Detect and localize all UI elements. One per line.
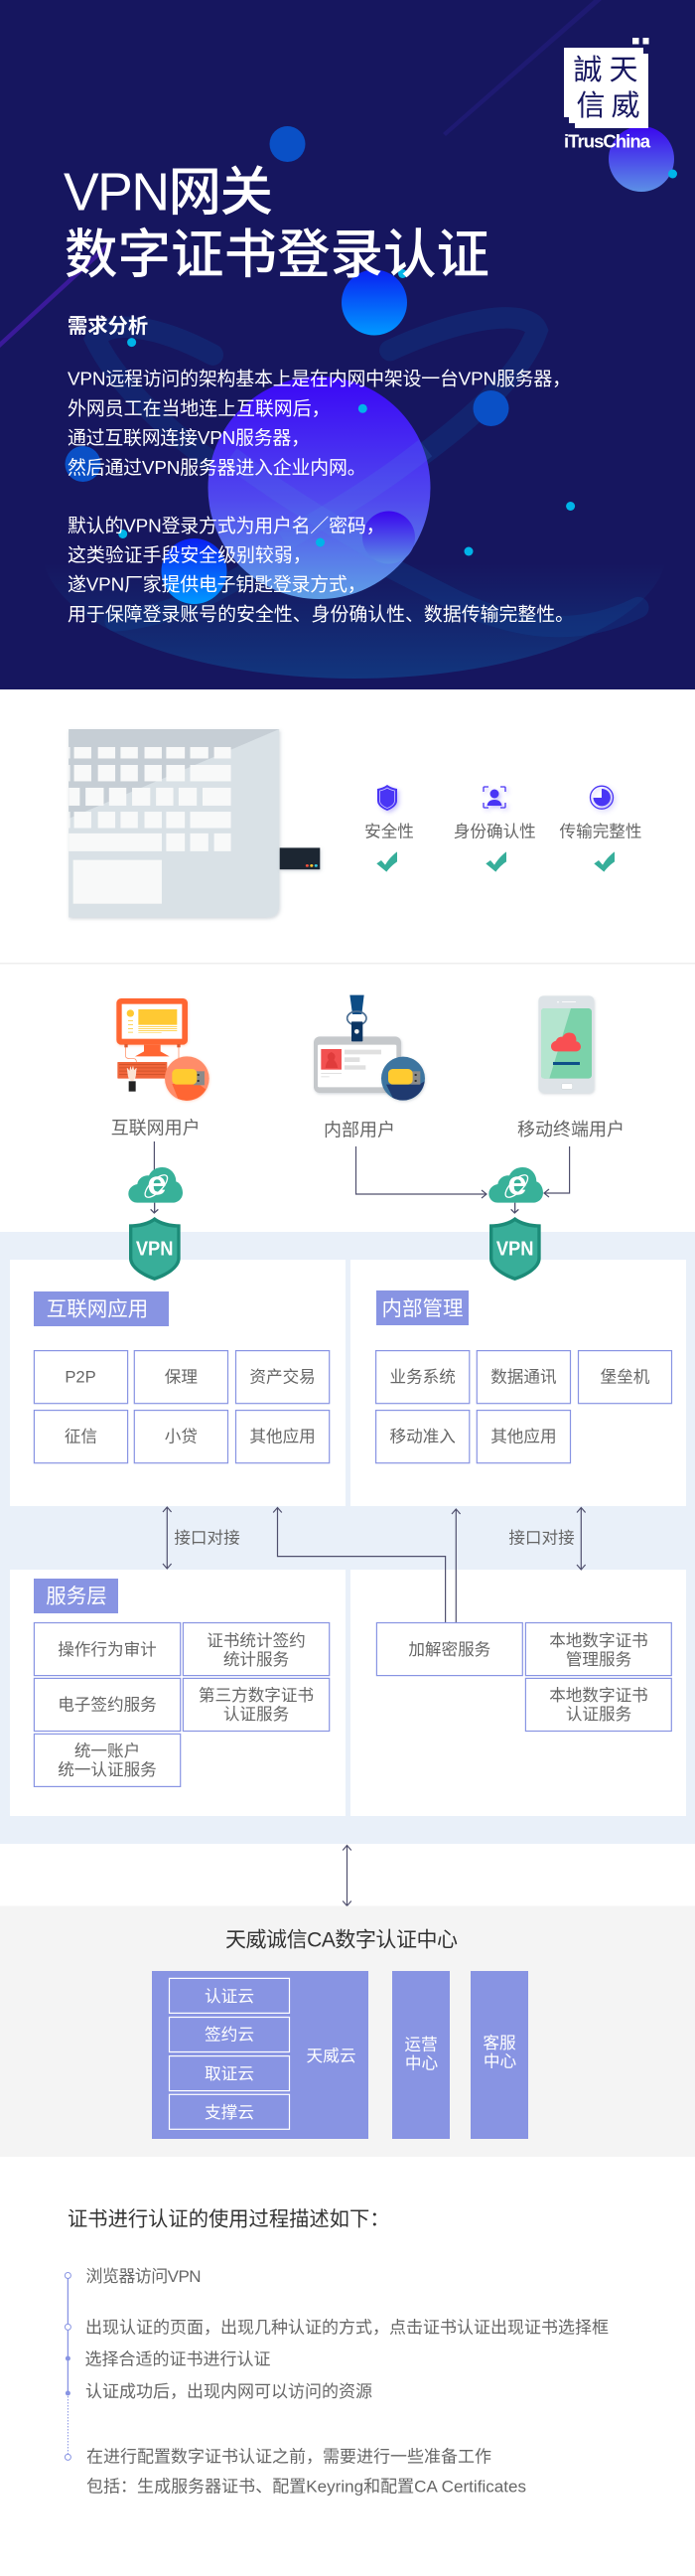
heading: internet applications: 互联网应用 <box>47 1297 148 1321</box>
box: unified account <box>34 1734 181 1786</box>
text block: paragraph one: 然后通过VPN服务器进入企业内网。 <box>68 457 366 479</box>
circle: lower bright moon <box>161 538 226 604</box>
box: other apps: 其他应用 <box>249 1427 316 1446</box>
text block: paragraph two: 遂VPN厂家提供电子钥匙登录方式， <box>68 574 366 596</box>
planet rings <box>95 318 638 627</box>
heading: internal management <box>376 1290 469 1325</box>
panel: iTrus cloud: 取证云 <box>205 2064 254 2083</box>
panel: local services <box>350 1570 686 1816</box>
box: unified account: 统一账户 <box>74 1742 140 1760</box>
logo: iTrusChina: iTrusChina <box>564 131 651 151</box>
label: internet user: 互联网用户 <box>111 1119 201 1138</box>
heading: internet applications <box>34 1291 169 1326</box>
icon: internet cloud left <box>128 1164 183 1213</box>
label: identity confirmation: 身份确认性 <box>454 823 536 840</box>
box: e-signature <box>34 1678 181 1731</box>
illustration: laptop with usb key <box>69 729 320 917</box>
box: local cert authentication: 认证服务 <box>566 1705 631 1724</box>
circle: blue planet small top <box>270 126 306 162</box>
box: e-signature: 电子签约服务 <box>58 1695 157 1715</box>
decorative dots <box>118 169 677 556</box>
box: certificate stats <box>183 1623 330 1676</box>
circle: big planet <box>208 377 431 599</box>
box: certificate stats: 证书统计签约 <box>207 1631 306 1650</box>
arrow: left interface <box>163 1507 172 1569</box>
box: third party cert <box>183 1678 330 1731</box>
logo: iTrusChina: 信 <box>576 89 606 122</box>
logo: iTrusChina: 誠 <box>573 54 603 86</box>
text block: steps <box>85 2267 609 2496</box>
box: business system: 业务系统 <box>390 1367 456 1387</box>
box: local cert management: 管理服务 <box>566 1650 631 1669</box>
box: credit <box>34 1411 128 1463</box>
panel: CA center <box>0 1906 695 2157</box>
text block: paragraph one: VPN远程访问的架构基本上是在内网中架设一台VPN服务器， <box>68 368 571 389</box>
text block: paragraph one <box>68 368 571 479</box>
label: left interface: 接口对接 <box>174 1528 240 1548</box>
text block: paragraph one: 通过互联网连接VPN服务器， <box>68 427 310 449</box>
box: bastion host <box>578 1351 671 1404</box>
icon: check <box>376 851 397 872</box>
panel: operations center: 中心 <box>405 2054 438 2072</box>
icon: VPN shield right <box>489 1217 541 1281</box>
box: asset trading <box>236 1351 330 1404</box>
box: third party cert: 认证服务 <box>223 1705 289 1724</box>
box: P2P: P2P <box>65 1367 96 1387</box>
panel: operations center: 运营 <box>404 2035 438 2054</box>
timeline <box>65 2273 70 2460</box>
circle: blue moon left <box>66 446 101 482</box>
title <box>64 163 489 284</box>
box: bastion host: 堡垒机 <box>601 1367 650 1387</box>
icon: internet user monitor <box>116 998 209 1101</box>
icon: internet cloud left: e <box>147 1164 167 1202</box>
text block: paragraph two: 用于保障登录账号的安全性、身份确认性、数据传输完整性。 <box>68 604 574 626</box>
box: audit: 操作行为审计 <box>58 1640 157 1659</box>
arrow: internal user to cloud <box>355 1146 486 1198</box>
panel: internal management <box>350 1260 686 1506</box>
icon: check <box>594 851 615 872</box>
text block: paragraph two: 这类验证手段安全级别较弱， <box>68 544 312 566</box>
arrow: right interface <box>577 1508 586 1570</box>
band overlay on planet <box>230 448 426 558</box>
box: P2P <box>34 1351 128 1404</box>
icon: VPN shield left: VPN <box>136 1239 173 1261</box>
circle: gradient moon behind logo <box>609 126 674 192</box>
logo: iTrusChina: 天 <box>609 55 638 86</box>
heading: CA center: 天威诚信CA数字认证中心 <box>225 1929 458 1951</box>
label: transport integrity: 传输完整性 <box>560 823 641 840</box>
label: internal user: 内部用户 <box>324 1121 395 1140</box>
arrow: mobile user to cloud <box>544 1146 570 1197</box>
icon: integrity pie <box>590 786 614 809</box>
box: credit: 征信 <box>65 1427 97 1446</box>
label: right interface: 接口对接 <box>508 1528 575 1548</box>
title: VPN网关 <box>64 163 273 223</box>
box: mobile access: 移动准入 <box>390 1427 456 1446</box>
box: local cert management: 本地数字证书 <box>549 1631 648 1650</box>
heading: service layer <box>34 1579 118 1613</box>
heading: requirement analysis: 需求分析 <box>68 315 148 338</box>
icon: internal user badge <box>314 995 425 1101</box>
box: unified account: 统一认证服务 <box>58 1760 157 1779</box>
arrow: system to CA <box>343 1846 351 1905</box>
box: other apps internal <box>477 1411 570 1463</box>
arrow: internet user to cloud <box>153 1141 155 1172</box>
heading: internal management: 内部管理 <box>381 1297 463 1320</box>
icon: mobile user phone <box>538 995 594 1093</box>
panel: iTrus cloud: 签约云 <box>205 2025 254 2045</box>
box: encrypt decrypt: 加解密服务 <box>408 1640 490 1659</box>
text block: steps: 认证成功后，出现内网可以访问的资源 <box>85 2382 372 2401</box>
logo: iTrusChina: 威 <box>611 89 640 122</box>
box: audit <box>34 1623 181 1676</box>
icon: check <box>486 851 506 872</box>
label: security: 安全性 <box>364 823 414 840</box>
text block: paragraph one: 外网员工在当地连上互联网后， <box>68 397 330 419</box>
panel: service layer <box>10 1570 346 1816</box>
box: factoring <box>134 1351 228 1404</box>
box: other apps internal: 其他应用 <box>490 1427 557 1446</box>
heading: process description: 证书进行认证的使用过程描述如下： <box>68 2208 390 2231</box>
box: mobile access <box>376 1411 470 1463</box>
box: business system <box>376 1351 470 1404</box>
panel: iTrus cloud: 支撑云 <box>205 2103 254 2122</box>
box: certificate stats: 统计服务 <box>223 1650 289 1669</box>
box: local cert management <box>525 1623 671 1676</box>
box: data communication: 数据通讯 <box>490 1367 557 1387</box>
icon: VPN shield right: VPN <box>496 1239 533 1261</box>
text block: steps: 在进行配置数字证书认证之前，需要进行一些准备工作 <box>86 2448 491 2466</box>
box: asset trading: 资产交易 <box>249 1367 316 1387</box>
text block: paragraph two: 默认的VPN登录方式为用户名／密码， <box>68 515 385 536</box>
label: mobile user: 移动终端用户 <box>517 1120 625 1139</box>
panel: internet applications <box>10 1260 346 1506</box>
arrow: decrypt service to internal management <box>452 1509 461 1623</box>
text block: steps: 选择合适的证书进行认证 <box>85 2350 270 2368</box>
box: micro loan: 小贷 <box>165 1427 198 1446</box>
text block: paragraph two <box>68 515 574 626</box>
heading: service layer: 服务层 <box>46 1586 107 1607</box>
box: other apps <box>236 1411 330 1463</box>
panel: customer service center <box>471 1971 528 2139</box>
arrow: decrypt service to internet apps <box>273 1508 446 1623</box>
title: 数字证书登录认证 <box>65 227 489 284</box>
box: third party cert: 第三方数字证书 <box>199 1686 314 1705</box>
panel: customer service center: 客服 <box>483 2034 516 2052</box>
box: factoring: 保理 <box>165 1367 198 1387</box>
panel: header background <box>0 0 695 689</box>
panel: iTrus cloud: 认证云 <box>205 1987 254 2006</box>
icon: internet cloud right: e <box>507 1164 527 1202</box>
panel: operations center <box>392 1971 450 2139</box>
panel: iTrus cloud: 天威云 <box>306 2046 356 2065</box>
circle: moon on planet <box>362 511 415 564</box>
box: local cert authentication: 本地数字证书 <box>549 1686 648 1705</box>
icon: internet cloud right <box>488 1164 543 1213</box>
text block: steps: 浏览器访问VPN <box>85 2267 201 2286</box>
panel: iTrus cloud <box>152 1971 368 2139</box>
circle: blue moon right <box>473 390 508 426</box>
box: encrypt decrypt <box>376 1623 522 1676</box>
logo: iTrusChina <box>564 38 651 151</box>
circle: bright blue moon <box>342 270 407 336</box>
panel: customer service center: 中心 <box>484 2052 516 2070</box>
panel: light blue system background <box>0 1232 695 1844</box>
icon: VPN shield left <box>129 1217 181 1281</box>
icon: shield <box>377 785 397 811</box>
box: local cert authentication <box>525 1678 671 1731</box>
box: data communication <box>477 1351 570 1404</box>
text block: steps: 出现认证的页面，出现几种认证的方式，点击证书认证出现证书选择框 <box>85 2319 609 2337</box>
text block: steps: 包括：生成服务器证书、配置Keyring和配置CA Certificates <box>86 2478 526 2496</box>
box: micro loan <box>134 1411 228 1463</box>
icon: identity <box>484 787 505 808</box>
